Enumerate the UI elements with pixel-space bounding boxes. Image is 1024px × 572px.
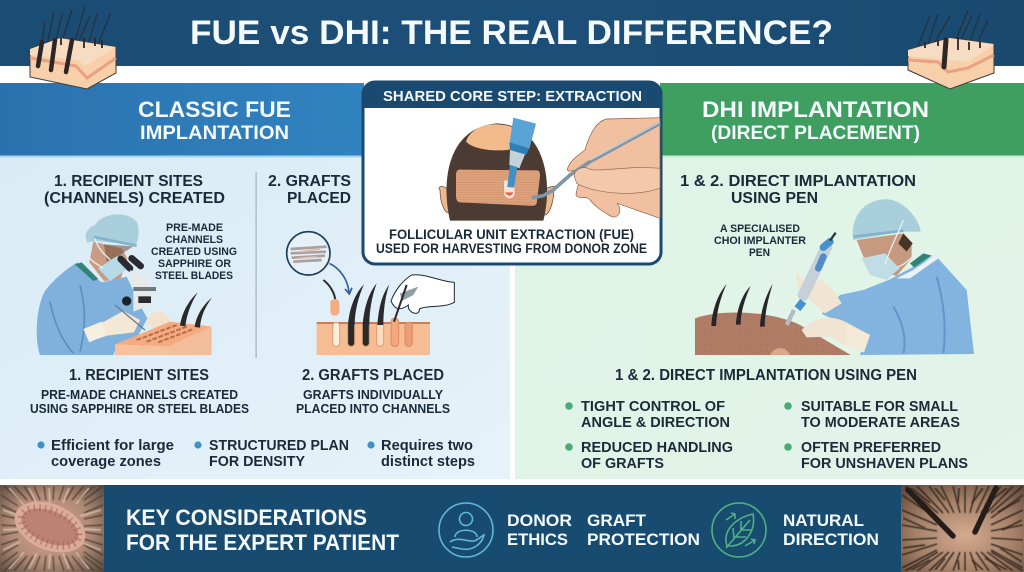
footer heading: KEY CONSIDERATIONS xyxy=(126,505,367,530)
callout: choi pen: A SPECIALISED xyxy=(720,223,800,235)
step summary: 1 & 2. DIRECT IMPLANTATION USING PEN xyxy=(615,367,917,384)
step 1 summary: PRE-MADE CHANNELS CREATED xyxy=(41,388,238,402)
step 1 heading: 1. RECIPIENT SITES xyxy=(54,173,203,190)
illustration: surgeon with implanter pen xyxy=(695,199,974,355)
bullet: tight control: ANGLE & DIRECTION xyxy=(581,414,730,431)
callout: pre-made channels: PRE-MADE xyxy=(166,222,223,234)
bullet: efficient: Efficient for large xyxy=(51,437,174,454)
bullet: reduced handling: REDUCED HANDLING xyxy=(581,439,733,456)
card heading: SHARED CORE STEP: EXTRACTION xyxy=(383,88,642,105)
footer heading xyxy=(126,505,400,555)
callout: pre-made channels xyxy=(151,222,237,282)
step 2 heading: 2. GRAFTS xyxy=(268,173,351,190)
bullet: two steps: distinct steps xyxy=(381,453,475,470)
icon: skin block right xyxy=(908,10,994,89)
bullet: structured plan: STRUCTURED PLAN xyxy=(209,437,349,454)
bullet: unshaven xyxy=(784,439,968,472)
step 2 heading: PLACED xyxy=(287,190,351,207)
callout: pre-made channels: SAPPHIRE OR xyxy=(158,258,231,270)
bullet: efficient: coverage zones xyxy=(51,453,161,470)
step heading: USING PEN xyxy=(731,190,818,207)
illustration: donor zone extraction xyxy=(439,118,660,221)
icon: donor ethics xyxy=(439,503,493,557)
step 2 summary: 2. GRAFTS PLACED xyxy=(302,367,444,384)
label: donor ethics xyxy=(507,511,572,549)
bullet: reduced handling: OF GRAFTS xyxy=(581,455,664,472)
bullet: structured plan xyxy=(194,437,349,470)
bullet: efficient xyxy=(37,437,174,470)
bullet: unshaven: OFTEN PREFERRED xyxy=(801,439,941,456)
card caption: FOLLICULAR UNIT EXTRACTION (FUE) xyxy=(389,226,634,242)
card caption xyxy=(376,226,647,256)
bullet: tight control xyxy=(565,398,730,431)
footer band xyxy=(0,485,1024,572)
panel: shared extraction step xyxy=(363,82,661,264)
card heading xyxy=(363,82,661,108)
heading: classic FUE xyxy=(0,83,364,156)
bullet: suitable: SUITABLE FOR SMALL xyxy=(801,398,958,415)
callout: choi pen: CHOI IMPLANTER xyxy=(714,235,806,247)
title banner xyxy=(0,0,1024,66)
label: graft protection: PROTECTION xyxy=(587,530,700,549)
heading: classic FUE: IMPLANTATION xyxy=(140,123,289,144)
photo: natural hair direction xyxy=(901,485,1024,572)
callout: pre-made channels: CREATED USING xyxy=(151,246,237,258)
callout: pre-made channels: STEEL BLADES xyxy=(155,270,233,282)
step 2 summary xyxy=(296,367,450,416)
photo: donor area xyxy=(0,485,104,572)
callout: choi pen xyxy=(714,223,806,259)
step 1 heading: (CHANNELS) CREATED xyxy=(44,190,225,207)
heading: DHI xyxy=(660,83,1024,156)
label: natural direction: NATURAL xyxy=(783,511,864,530)
label: natural direction xyxy=(783,511,879,549)
illustration: surgeon at microscope xyxy=(37,214,212,355)
icon: natural direction leaf xyxy=(712,503,766,557)
label: graft protection: GRAFT xyxy=(587,511,647,530)
step heading: 1 & 2. DIRECT IMPLANTATION xyxy=(680,173,916,190)
card caption: USED FOR HARVESTING FROM DONOR ZONE xyxy=(376,240,647,256)
step heading xyxy=(680,173,916,207)
step 2 summary: PLACED INTO CHANNELS xyxy=(296,402,450,416)
callout: choi pen: PEN xyxy=(749,247,770,259)
heading: classic FUE: CLASSIC FUE xyxy=(138,97,291,122)
heading: DHI: DHI IMPLANTATION xyxy=(702,97,929,122)
bullet: reduced handling xyxy=(565,439,733,472)
label: donor ethics: DONOR xyxy=(507,511,572,530)
icon: skin block left xyxy=(30,6,116,89)
label: donor ethics: ETHICS xyxy=(507,530,568,549)
step 2 heading xyxy=(268,173,351,207)
bullet: structured plan: FOR DENSITY xyxy=(209,453,305,470)
illustration: grafts placed into channels xyxy=(287,232,454,355)
bullet: tight control: TIGHT CONTROL OF xyxy=(581,398,725,415)
title: FUE vs DHI: THE REAL DIFFERENCE? xyxy=(190,14,833,52)
bullet: suitable: TO MODERATE AREAS xyxy=(801,414,960,431)
bullet: two steps xyxy=(367,437,475,470)
step 2 summary: GRAFTS INDIVIDUALLY xyxy=(303,388,444,402)
callout: pre-made channels: CHANNELS xyxy=(165,234,223,246)
label: natural direction: DIRECTION xyxy=(783,530,879,549)
step 1 summary xyxy=(30,367,249,416)
label: graft protection xyxy=(587,511,700,549)
step 1 heading xyxy=(44,173,225,207)
panel: DHI implantation xyxy=(515,83,1024,479)
bullet: unshaven: FOR UNSHAVEN PLANS xyxy=(801,455,968,472)
heading: DHI: (DIRECT PLACEMENT) xyxy=(711,123,920,144)
panel: classic FUE xyxy=(0,83,510,479)
footer heading: FOR THE EXPERT PATIENT xyxy=(126,530,400,555)
bullet: suitable xyxy=(784,398,960,431)
bullet: two steps: Requires two xyxy=(381,437,473,454)
step 1 summary: 1. RECIPIENT SITES xyxy=(69,367,209,384)
step 1 summary: USING SAPPHIRE OR STEEL BLADES xyxy=(30,402,249,416)
